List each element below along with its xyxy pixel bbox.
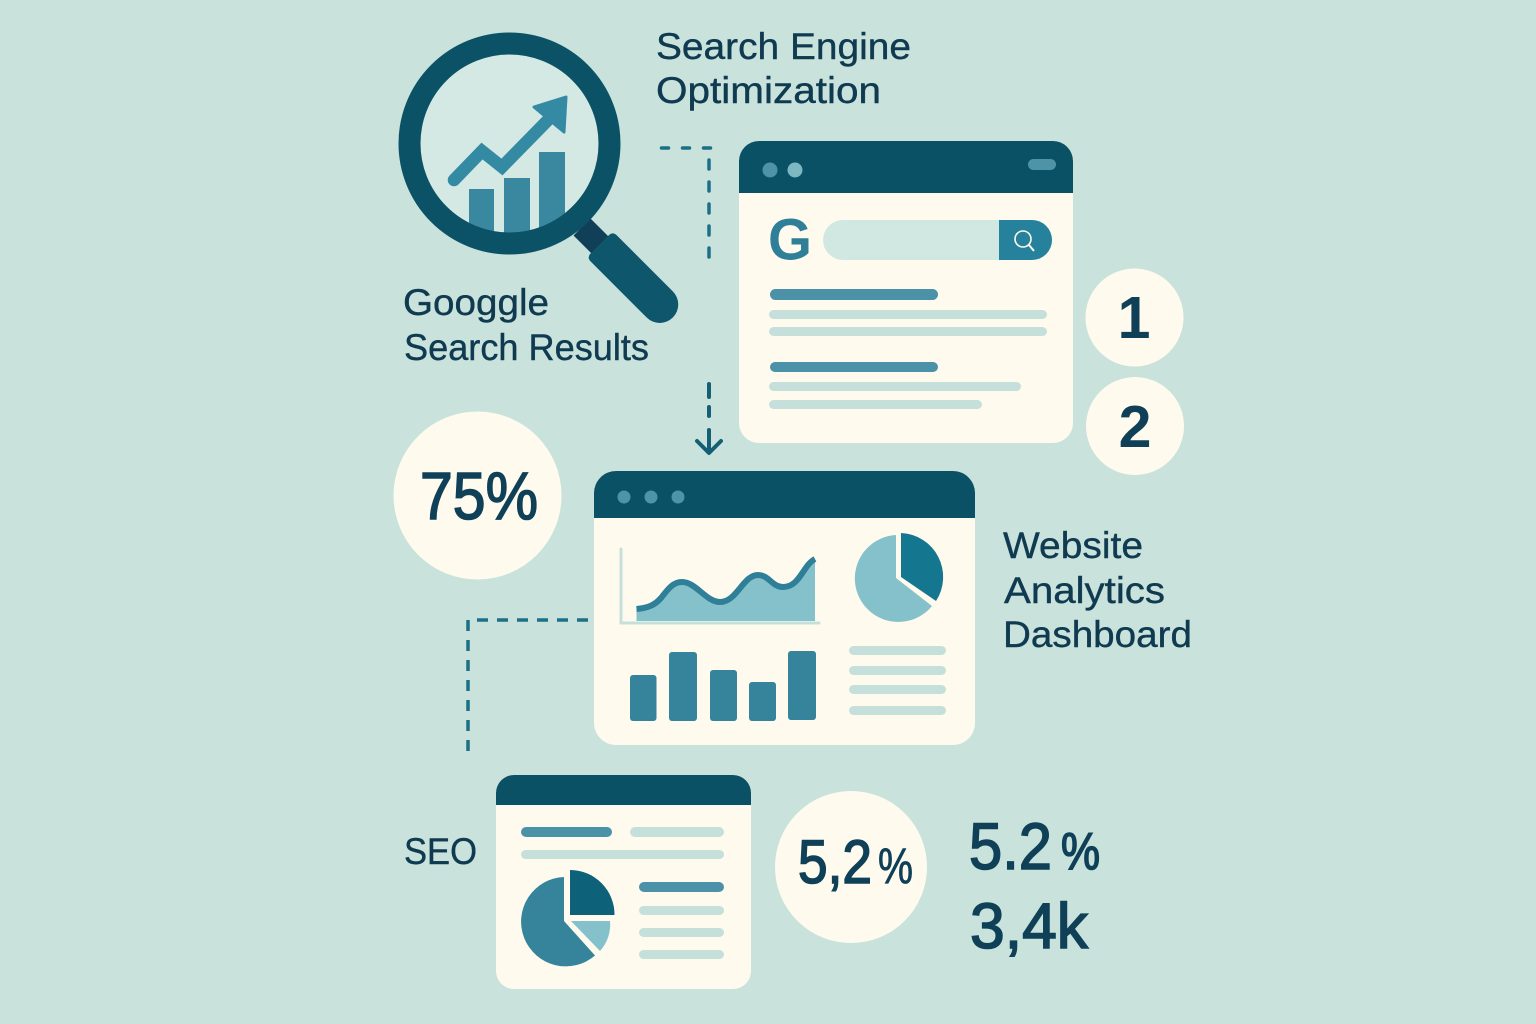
window title bar	[739, 141, 1073, 193]
heading: Googgle Search Results: Googgle	[403, 282, 549, 323]
dashboard title bar	[594, 471, 975, 518]
SEO right text lines	[639, 882, 724, 959]
Google G logo: G	[768, 208, 812, 272]
SEO pie chart	[521, 870, 615, 966]
dashed connector: dashboard to SEO window	[468, 620, 588, 754]
search bar	[823, 220, 1052, 260]
stat: 5.2 %: %	[1061, 823, 1100, 881]
magnifier lens background	[420, 54, 600, 234]
magnifier handle	[582, 227, 686, 331]
heading: Website Analytics Dashboard: Website	[1003, 525, 1143, 566]
dashboard pie chart	[855, 533, 943, 622]
search result two	[769, 362, 1021, 409]
badge: 75%: 75%	[420, 459, 538, 534]
heading: Website Analytics Dashboard: Analytics	[1004, 570, 1165, 611]
magnifier ring	[410, 44, 610, 244]
lens bar chart	[469, 152, 565, 232]
heading: Search Engine Optimization: Search Engine	[656, 26, 911, 67]
lens trend arrow	[454, 97, 566, 180]
dashed connector: magnifier to search window	[662, 148, 711, 258]
dashboard legend lines	[849, 646, 946, 715]
stat: 3,4k: 3,4k	[970, 890, 1089, 962]
heading: Website Analytics Dashboard: Dashboard	[1003, 614, 1192, 655]
badge: 75%	[394, 412, 562, 580]
arrow: search window to dashboard	[697, 384, 721, 453]
SEO top text lines	[521, 827, 724, 859]
panel: website analytics dashboard window	[594, 471, 975, 745]
badge: 5,2%	[775, 791, 927, 943]
badge: 5,2%: 5,2	[798, 828, 872, 896]
heading: Googgle Search Results	[403, 282, 649, 368]
heading: Website Analytics Dashboard	[1003, 525, 1192, 655]
badge: number 2	[1086, 377, 1184, 475]
badge: number 2: 2	[1119, 394, 1151, 460]
badge: 5,2%: %	[878, 838, 913, 894]
SEO window title bar	[496, 775, 751, 805]
heading: SEO: SEO	[404, 831, 477, 872]
panel: SEO report window	[496, 775, 751, 989]
heading: Search Engine Optimization	[656, 26, 911, 111]
search result one	[769, 289, 1047, 336]
dashboard bar chart	[630, 651, 816, 721]
panel: Google search results window	[739, 141, 1073, 443]
stat: 5.2 %: 5.2	[969, 809, 1052, 883]
heading: Search Engine Optimization: Optimization	[656, 70, 881, 111]
icon: magnifying glass with growth chart	[410, 44, 686, 331]
heading: Googgle Search Results: Search Results	[404, 327, 649, 368]
badge: number 1	[1086, 268, 1184, 366]
badge: number 1: 1	[1118, 285, 1150, 351]
area chart	[621, 549, 819, 623]
